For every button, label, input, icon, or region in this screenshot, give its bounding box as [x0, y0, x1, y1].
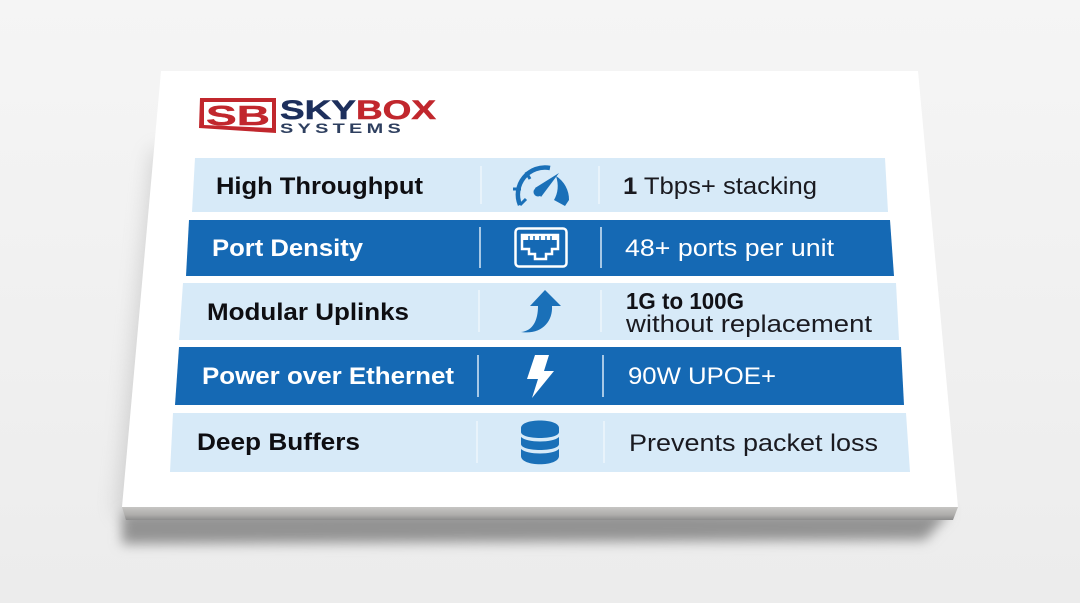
- row: modular uplinks: [179, 283, 899, 340]
- paper stack edge: [122, 507, 958, 520]
- row: power over ethernet: [175, 347, 904, 405]
- icon: up arrow: [521, 290, 561, 332]
- label: deep buffers: Deep Buffers: [197, 429, 360, 456]
- logo subtitle: SYSTEMS: [280, 120, 405, 136]
- row: deep buffers: [170, 413, 910, 472]
- value: uplink speeds: 1G to 100G: [626, 288, 744, 314]
- row: high throughput: [192, 158, 888, 212]
- logo wordmark: SKY BOX: [280, 95, 436, 125]
- icon: ethernet port: [516, 228, 566, 266]
- value: ports per unit: 48+ ports per unit: [625, 235, 834, 262]
- logo: [199, 95, 436, 136]
- value: uplink speeds: without replacement: [625, 311, 872, 338]
- logo emblem: SB: [206, 100, 270, 131]
- value: uplink speeds: [625, 288, 872, 338]
- label: port density: Port Density: [212, 235, 364, 262]
- label: power over ethernet: Power over Ethernet: [202, 363, 454, 390]
- row: port density: [186, 220, 894, 276]
- card shadow: [116, 150, 950, 544]
- icon: database: [521, 420, 559, 464]
- value: upoe: 90W UPOE+: [628, 363, 776, 390]
- icon: lightning bolt: [527, 355, 554, 398]
- label: modular uplinks: Modular Uplinks: [207, 299, 409, 326]
- white card: [122, 71, 958, 507]
- logo emblem: [199, 98, 276, 133]
- icon: speedometer gauge: [513, 168, 569, 206]
- value: packet loss: Prevents packet loss: [629, 430, 878, 457]
- value: stacking: 1 Tbps+ stacking: [623, 173, 817, 200]
- label: high throughput: High Throughput: [216, 173, 423, 200]
